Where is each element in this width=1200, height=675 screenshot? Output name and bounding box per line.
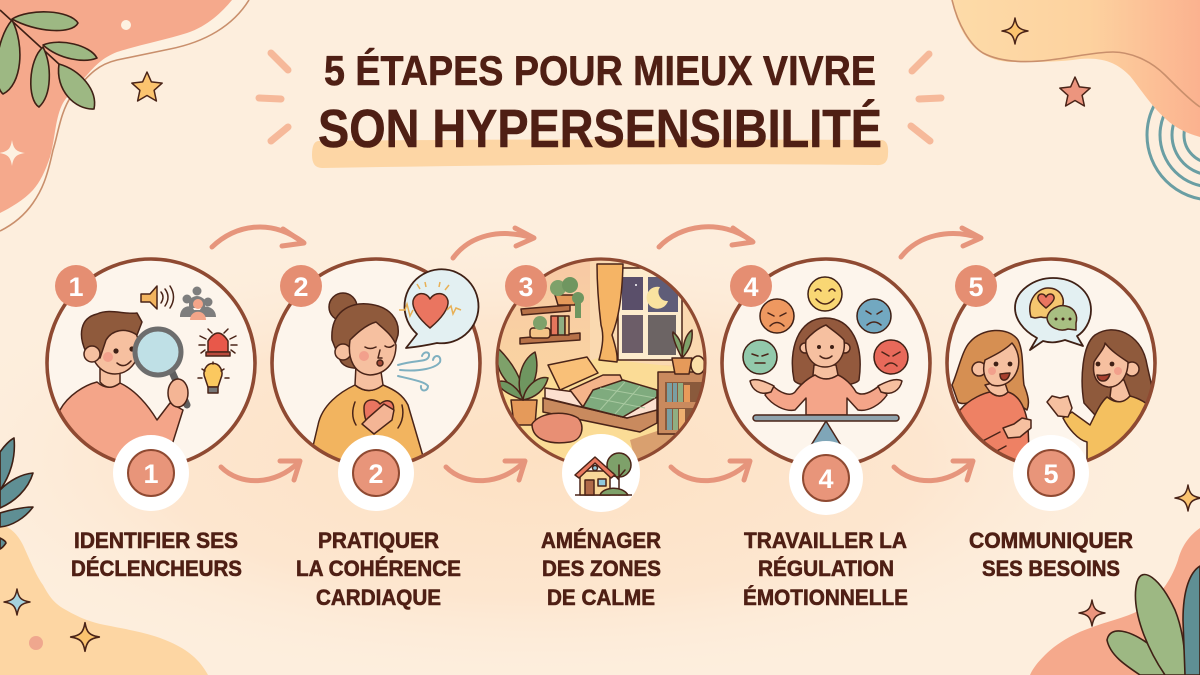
- label: step 3: DE CALME: [547, 585, 655, 610]
- decor: teal arcs: [1147, 70, 1200, 200]
- label: step 4: [743, 528, 908, 610]
- illustration: woman breathing: [312, 292, 423, 459]
- label: step 3: DES ZONES: [542, 556, 661, 581]
- illustration: calm bedroom: [498, 260, 704, 459]
- icon: crowd: [180, 286, 216, 320]
- icon: siren: [199, 329, 237, 356]
- ring: [722, 259, 930, 467]
- icon: magnifier: [135, 329, 188, 407]
- decor: top-left corner: [0, 0, 249, 231]
- icon: breath wind: [398, 352, 440, 390]
- label: step 1: DÉCLENCHEURS: [71, 556, 242, 581]
- title: 5 ÉTAPES POUR MIEUX VIVRE: [324, 47, 876, 94]
- badge: house icon: [562, 434, 640, 512]
- arrow: bottom 4 to 5: [894, 461, 973, 481]
- badge: number 1 top: 1: [68, 272, 84, 302]
- panel: step 1: [47, 259, 255, 511]
- icon: balance: [753, 415, 899, 447]
- label: step 1: IDENTIFIER SES: [74, 528, 238, 553]
- icon: angry red face: [874, 340, 908, 374]
- ring: [47, 259, 255, 467]
- badge: number 2 top: [280, 265, 322, 307]
- sub-element: bed: [543, 357, 657, 432]
- arrow: bottom 1 to 2: [221, 461, 300, 481]
- badge: number 4 bottom: 4: [818, 464, 834, 494]
- panel: step 4: [722, 259, 930, 515]
- badge: number 3 top: 3: [518, 272, 534, 302]
- label: step 5: [969, 528, 1133, 581]
- badge: number 1 bottom: [113, 435, 189, 511]
- label: step 2: LA COHÉRENCE: [296, 556, 461, 581]
- badge: number 5 top: [955, 265, 997, 307]
- icon: sad blue face: [857, 299, 891, 333]
- icon: salmon star: [1060, 77, 1090, 106]
- label: step 2: [296, 528, 461, 610]
- label: step 3: AMÉNAGER: [541, 528, 661, 553]
- icon: heart speech bubble: [399, 269, 479, 348]
- panel: step 2: [272, 259, 480, 511]
- icon: happy face: [808, 277, 842, 311]
- illustration: two women talking: [951, 329, 1152, 459]
- background glow: [0, 230, 1180, 675]
- badge: number 4 bottom: [789, 441, 863, 515]
- illustration: man with magnifier: [60, 310, 184, 459]
- arrow: bottom 2 to 3: [446, 461, 525, 481]
- badge: number 2 bottom: 2: [368, 459, 384, 489]
- badge: number 5 bottom: [1013, 435, 1089, 511]
- decor: bottom-left corner: [0, 438, 208, 675]
- ring: [947, 259, 1155, 467]
- badge: number 4 top: 4: [743, 272, 759, 302]
- icon: speaker: [141, 286, 174, 309]
- badge: number 1 bottom: 1: [143, 459, 159, 489]
- badge: number 3 top: [505, 265, 547, 307]
- arrow: top 3 to 4: [659, 227, 753, 247]
- label: step 4: ÉMOTIONNELLE: [743, 585, 908, 610]
- label: step 4: RÉGULATION: [758, 556, 894, 581]
- label: step 5: SES BESOINS: [982, 556, 1120, 581]
- ring: [497, 259, 705, 467]
- arrow: top 1 to 2: [212, 227, 304, 247]
- arrow: top 2 to 3: [453, 228, 534, 258]
- arrow: bottom 3 to 4: [671, 461, 750, 481]
- decor: top-right corner: [952, 0, 1200, 137]
- illustration: woman balancing emotions: [750, 318, 902, 415]
- label: step 3: [541, 528, 661, 610]
- label: step 4: TRAVAILLER LA: [744, 528, 907, 553]
- icon: lightbulb: [198, 362, 229, 393]
- title: SON HYPERSENSIBILITÉ: [318, 99, 882, 159]
- panel: step 3: [495, 257, 707, 512]
- ring: [272, 259, 480, 467]
- icon: conversation bubble: [1015, 278, 1091, 350]
- panel: step 5: [947, 259, 1155, 511]
- icon: yellow star: [132, 72, 162, 101]
- label: step 1: [71, 528, 242, 581]
- icon: sad orange face: [760, 299, 794, 333]
- badge: number 2 bottom: [338, 435, 414, 511]
- title rays: [259, 53, 941, 141]
- title: [312, 47, 888, 168]
- badge: number 1 top: [55, 265, 97, 307]
- badge: number 2 top: 2: [293, 272, 309, 302]
- badge: number 4 top: [730, 265, 772, 307]
- badge: number 5 top: 5: [968, 272, 984, 302]
- label: step 2: CARDIAQUE: [316, 585, 441, 610]
- label: step 5: COMMUNIQUER: [969, 528, 1133, 553]
- icon: calm green face: [743, 340, 777, 374]
- label: step 2: PRATIQUER: [318, 528, 439, 553]
- decor: top-left leaves: [0, 10, 97, 109]
- decor: bottom-right corner: [1030, 485, 1200, 675]
- arrow: top 4 to 5: [901, 228, 981, 257]
- badge: number 5 bottom: 5: [1043, 459, 1059, 489]
